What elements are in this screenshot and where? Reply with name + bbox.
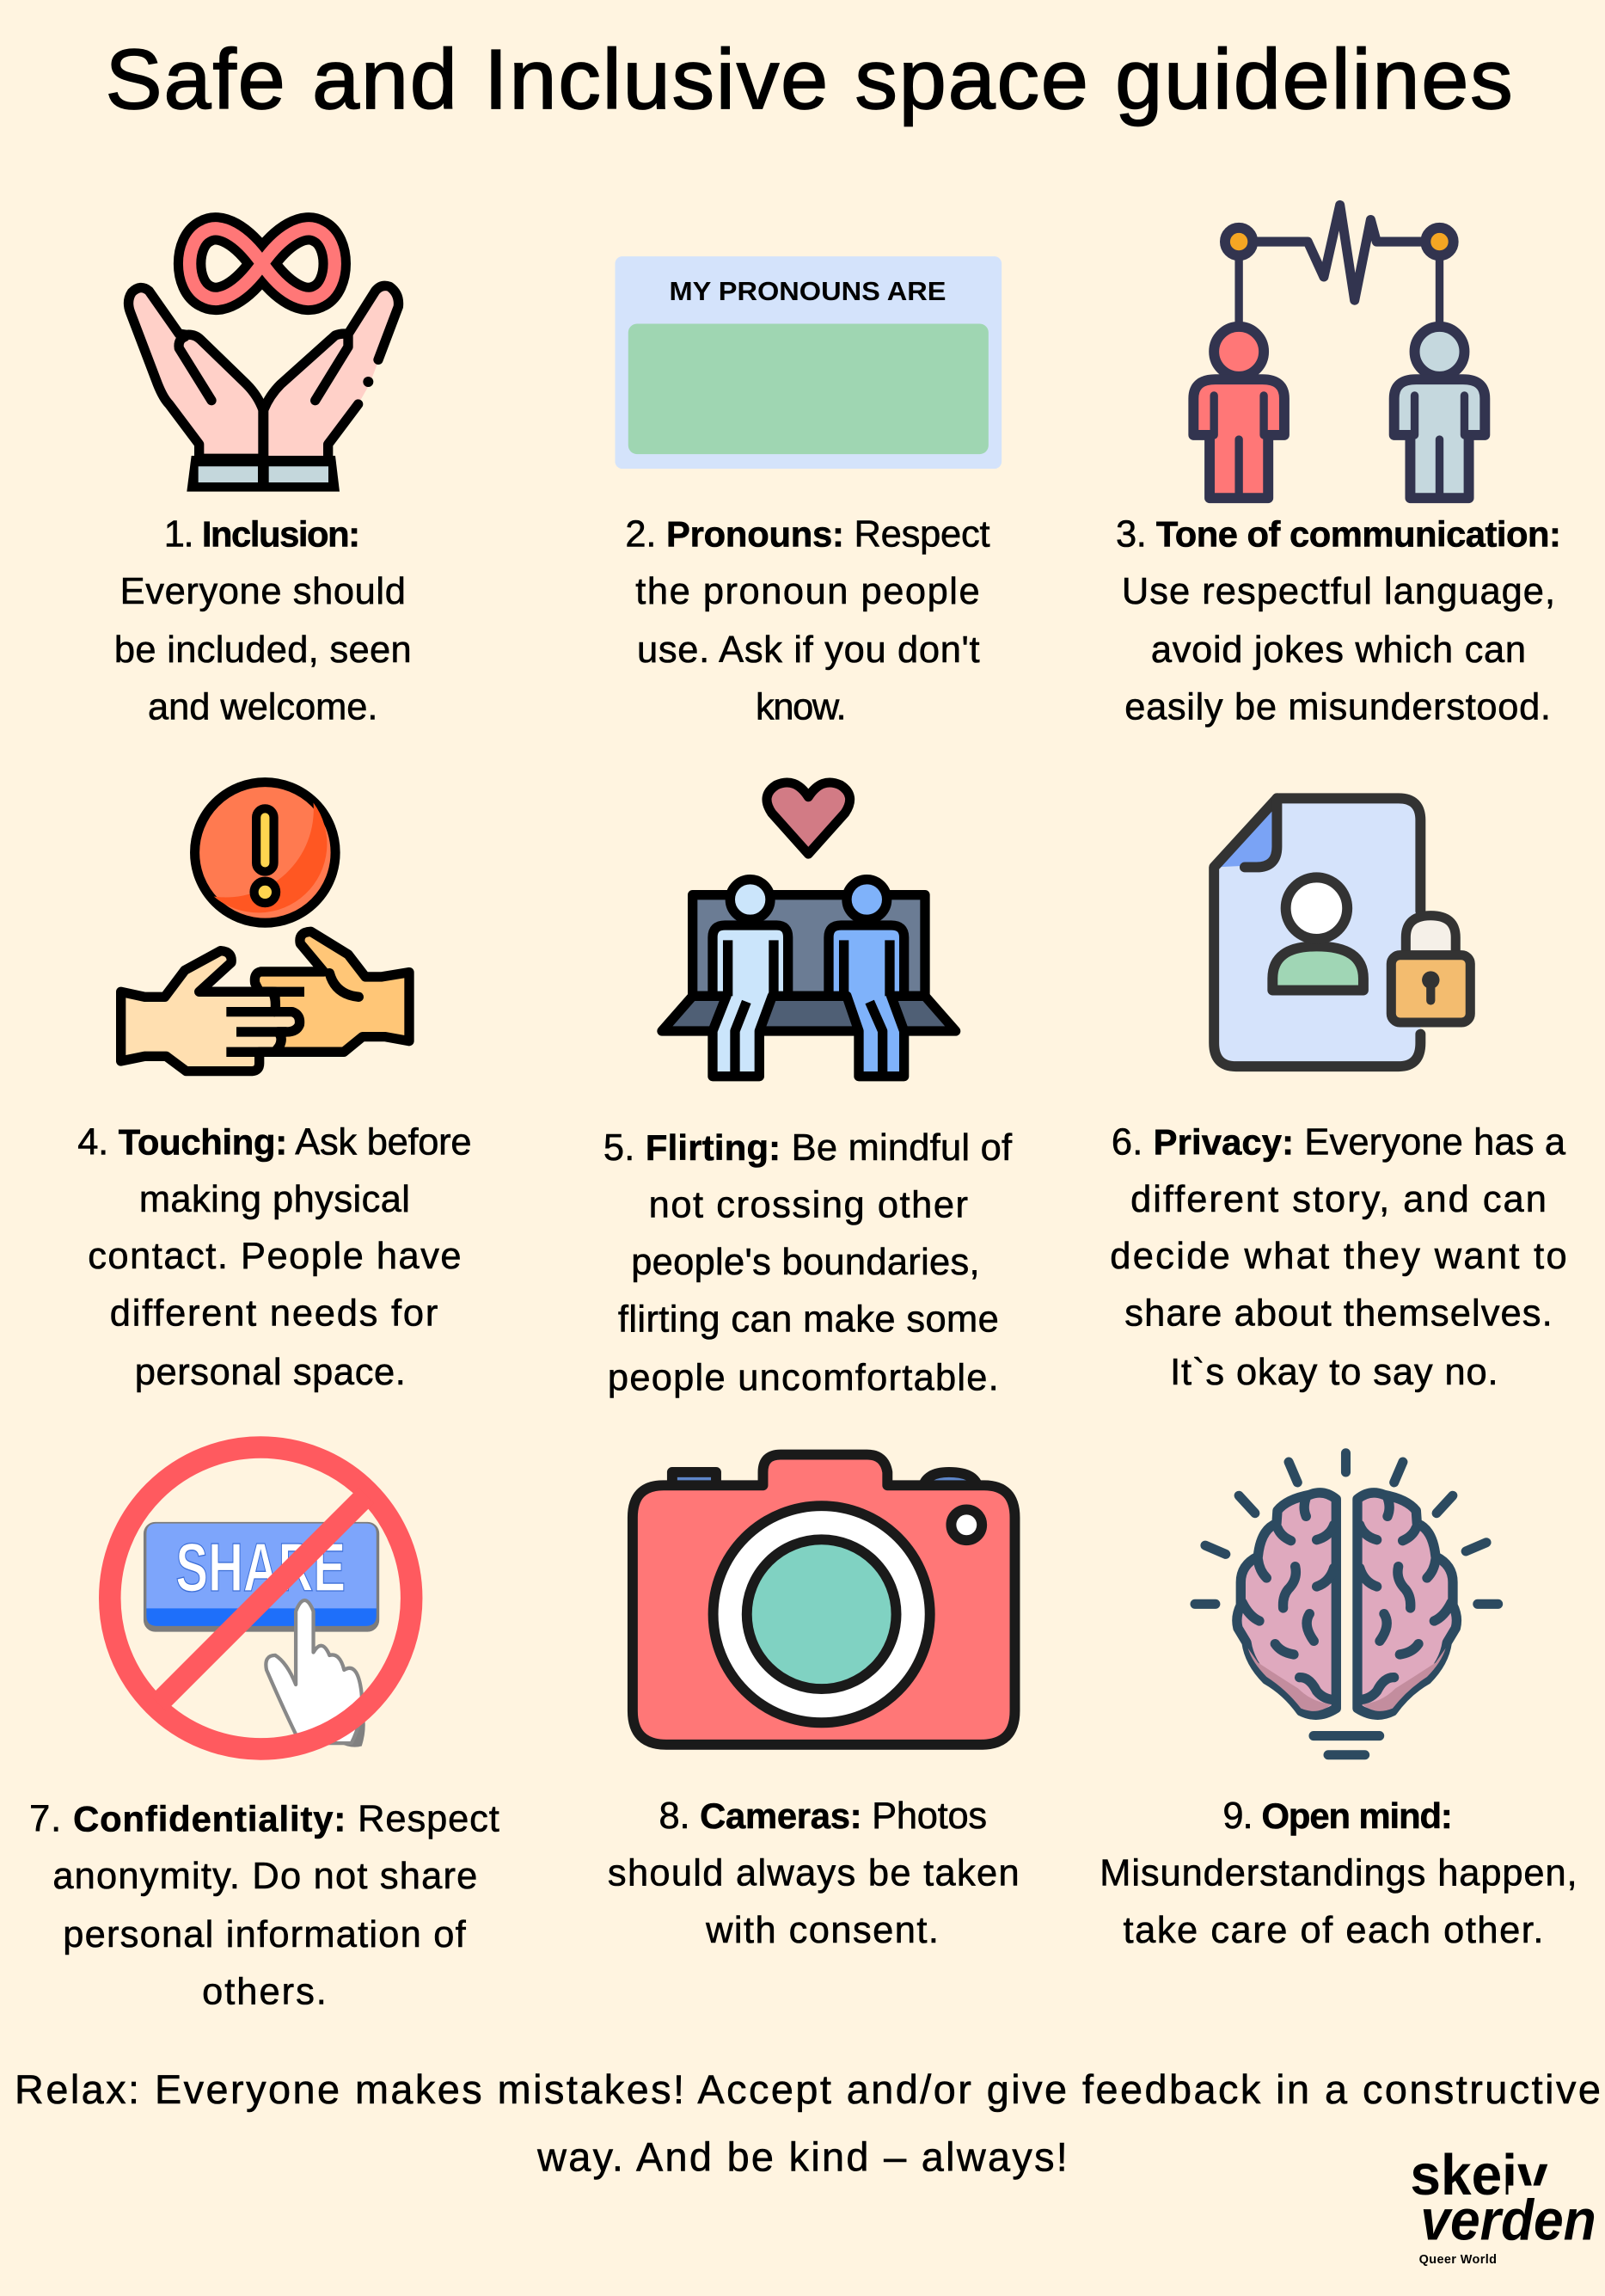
text: pronouns: know. [756, 686, 847, 727]
text: open mind: take care of each other. [1124, 1910, 1543, 1951]
text: tone of communication: avoid jokes which can [1151, 629, 1526, 671]
text: inclusion: Everyone should [120, 571, 406, 612]
icon: hands holding infinity symbol [129, 229, 399, 492]
icon: pronoun name card: MY PRONOUNS ARE [669, 277, 946, 306]
text: inclusion: 1. Inclusion: [164, 513, 360, 555]
text: confidentiality: others. [202, 1971, 327, 2012]
text: pronouns: the pronoun people [635, 571, 980, 612]
text: privacy: decide what they want to [1110, 1236, 1567, 1277]
logo: skeiv verden: verden [1420, 2189, 1596, 2253]
text: flirting: flirting can make some [618, 1298, 999, 1340]
panel: pronouns [615, 256, 1002, 727]
text: flirting: 5. Flirting: Be mindful of [603, 1127, 1013, 1169]
text: confidentiality [29, 1798, 499, 2012]
panel: tone of communication [1116, 205, 1561, 727]
closing note: way. And be kind – always! [536, 2135, 1068, 2180]
text: confidentiality: anonymity. Do not share [52, 1856, 477, 1897]
text: inclusion: be included, seen [114, 629, 412, 671]
text: tone of communication: 3. Tone of communication: [1116, 513, 1561, 555]
text: cameras: should always be taken [608, 1852, 1020, 1894]
text: cameras: with consent. [705, 1910, 939, 1951]
text: touching: personal space. [135, 1352, 406, 1393]
icon: brain with rays [1195, 1453, 1498, 1755]
panel: privacy [1110, 798, 1567, 1393]
logo: skeiv verden [1410, 2144, 1596, 2267]
text: privacy [1110, 1121, 1567, 1393]
text: open mind [1100, 1796, 1577, 1951]
text: pronouns: 2. Pronouns: Respect [625, 513, 990, 555]
closing note: Relax: Everyone makes mistakes! Accept and/or give feedback in a constructive [15, 2067, 1601, 2112]
text: confidentiality: personal information of [63, 1914, 467, 1955]
icon: pronoun name card [615, 256, 1002, 469]
panel: cameras [608, 1455, 1020, 1951]
icon: two people connected by a heartbeat line [1193, 205, 1485, 498]
text: touching: different needs for [110, 1293, 438, 1335]
icon: heart above two people on a bench [662, 783, 956, 1077]
title: Safe and Inclusive space guidelines [106, 32, 1513, 126]
text: privacy: It`s okay to say no. [1170, 1352, 1498, 1393]
logo: skeiv verden: Queer World [1419, 2253, 1497, 2267]
text: pronouns [625, 513, 990, 727]
text: flirting: not crossing other [649, 1185, 968, 1226]
panel: flirting [603, 783, 1013, 1399]
text: flirting [603, 1127, 1013, 1399]
text: tone of communication: Use respectful language, [1122, 571, 1555, 612]
panel: confidentiality [29, 1447, 499, 2012]
text: pronouns: use. Ask if you don't [637, 629, 980, 671]
panel: open mind [1100, 1453, 1577, 1951]
text: touching: making physical [139, 1179, 410, 1220]
text: flirting: people's boundaries, [631, 1242, 980, 1283]
text: touching [77, 1121, 472, 1393]
text: confidentiality: 7. Confidentiality: Respect [29, 1798, 499, 1839]
panel: inclusion [114, 229, 412, 727]
text: open mind: Misunderstandings happen, [1100, 1852, 1577, 1894]
text: tone of communication: easily be misunderstood. [1124, 686, 1551, 727]
text: inclusion: and welcome. [148, 686, 377, 727]
text: privacy: 6. Privacy: Everyone has a [1112, 1121, 1566, 1163]
text: flirting: people uncomfortable. [608, 1358, 999, 1399]
logo: skeiv verden: skeiv [1410, 2144, 1548, 2207]
text: open mind: 9. Open mind: [1222, 1796, 1453, 1837]
icon: camera [633, 1455, 1015, 1745]
icon: crossed-out share button: SHARE [175, 1529, 346, 1605]
icon: document with person and padlock [1214, 798, 1470, 1066]
icon: warning sign above touching hands [121, 783, 409, 1071]
panel: touching [77, 783, 472, 1393]
closing note [15, 2067, 1601, 2180]
text: touching: contact. People have [88, 1236, 462, 1277]
text: privacy: share about themselves. [1124, 1293, 1553, 1335]
icon: crossed-out share button [110, 1447, 412, 1749]
text: touching: 4. Touching: Ask before [77, 1121, 472, 1163]
text: tone of communication [1116, 513, 1561, 727]
text: cameras: 8. Cameras: Photos [659, 1796, 987, 1837]
text: cameras [608, 1796, 1020, 1951]
text: inclusion [114, 513, 412, 727]
text: privacy: different story, and can [1130, 1179, 1547, 1220]
